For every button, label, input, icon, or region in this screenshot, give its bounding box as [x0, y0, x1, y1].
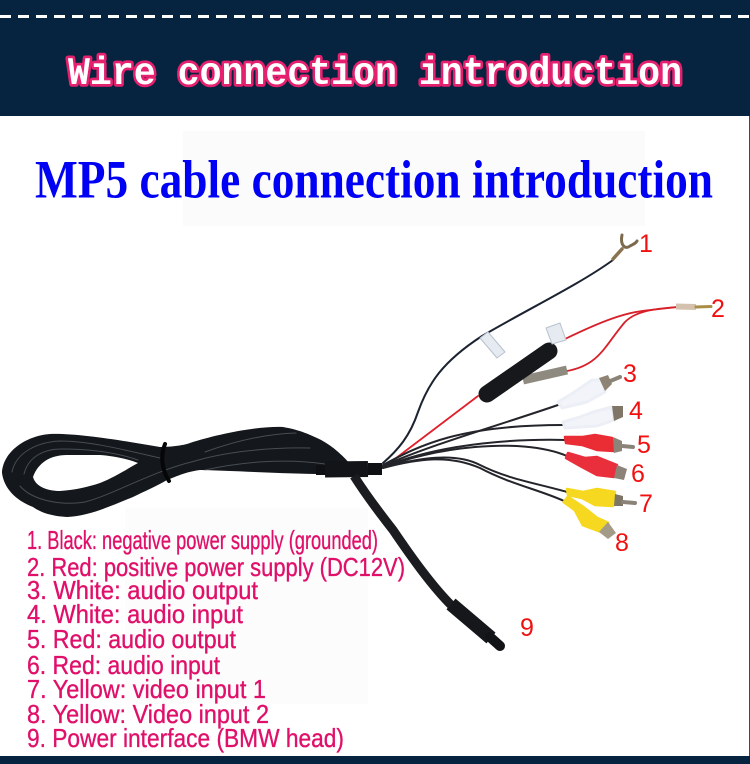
clips: [480, 323, 566, 358]
connector numbers: [520, 230, 725, 642]
wire legend: 1. Black: negative power supply (grounded): [27, 525, 378, 555]
cable diagram: [2, 235, 711, 646]
wire legend: [27, 525, 405, 753]
connector numbers: 6: [631, 460, 645, 488]
connector numbers: 4: [629, 397, 643, 425]
coiled main cable: [2, 427, 350, 517]
wire legend: 9. Power interface (BMW head): [27, 723, 344, 753]
wire legend: 6. Red: audio input: [27, 650, 221, 680]
connector numbers: 8: [615, 529, 629, 557]
wire legend: 2. Red: positive power supply (DC12V): [27, 552, 405, 582]
connector 5 red: [383, 435, 633, 467]
connector numbers: 1: [639, 230, 653, 258]
connector numbers: 7: [639, 490, 653, 518]
power cable: [354, 476, 452, 606]
wire legend: 4. White: audio input: [27, 599, 244, 629]
banner title: Wire connection introduction: [68, 52, 682, 96]
connector numbers: 3: [623, 360, 637, 388]
connector 8 yellow: [383, 459, 616, 539]
connector 3 white: [383, 375, 620, 466]
connector 6 red: [383, 446, 627, 480]
wire legend: 5. Red: audio output: [27, 624, 237, 654]
connector numbers: 2: [711, 295, 725, 323]
junction sleeve: [316, 469, 382, 470]
wire 2 red with fuse holder: [383, 306, 711, 468]
icon: power connector: [451, 604, 500, 646]
connector 4 white: [383, 406, 623, 465]
bottom bar: [0, 756, 750, 764]
wire legend: 3. White: audio output: [27, 575, 259, 605]
wire 1 black with fork: [383, 235, 637, 463]
connector numbers: 9: [520, 614, 534, 642]
wire legend: 8. Yellow: Video input 2: [27, 699, 269, 729]
connector numbers: 5: [637, 431, 651, 459]
header banner: [0, 0, 750, 116]
wire legend: 7. Yellow: video input 1: [27, 674, 266, 704]
connector 7 yellow: [383, 457, 635, 506]
